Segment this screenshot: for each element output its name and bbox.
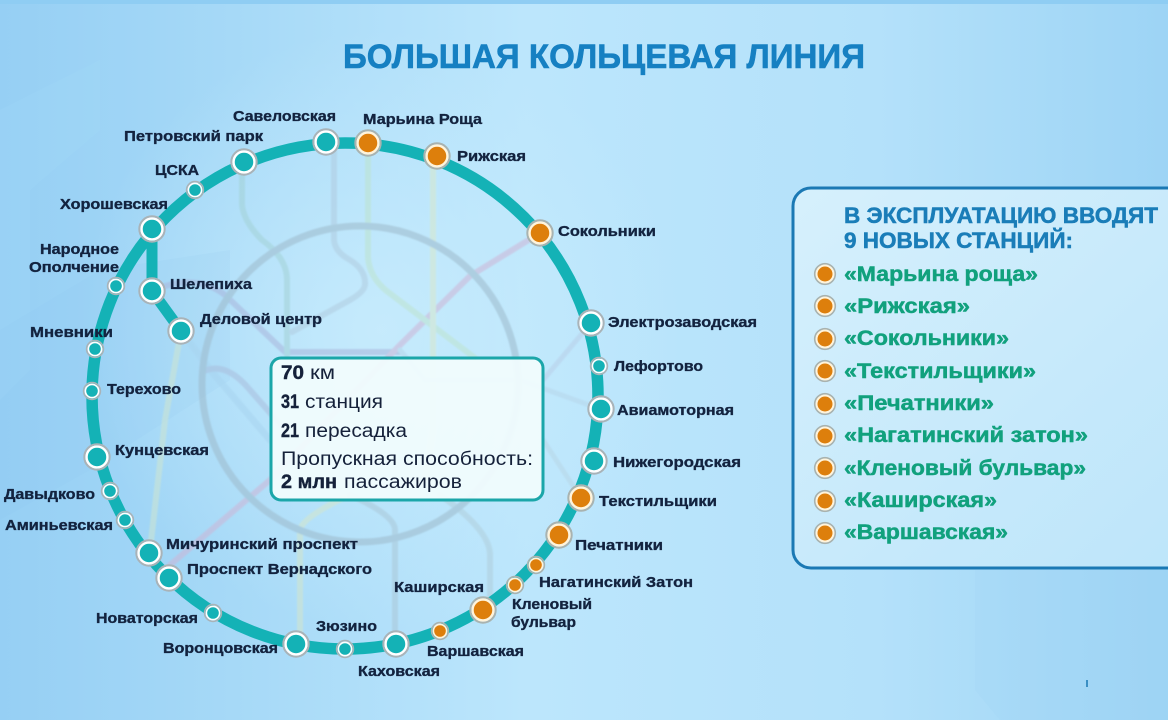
station labels: Давыдково xyxy=(4,486,95,503)
panel heading: 9 НОВЫХ СТАНЦИЙ: xyxy=(844,228,1073,253)
station labels: Сокольники xyxy=(558,223,656,240)
panel: new stations xyxy=(793,188,1168,568)
station labels: Лефортово xyxy=(614,358,703,375)
bullets xyxy=(816,266,834,542)
transfers count: 21 xyxy=(281,421,299,442)
capacity: 2 млн xyxy=(281,472,337,493)
station labels: Мневники xyxy=(30,324,113,341)
branch line xyxy=(152,229,181,331)
existing interchange stations xyxy=(84,129,614,657)
station list: «Печатники» xyxy=(844,392,994,415)
transfers count: пересадка xyxy=(305,421,407,442)
length xyxy=(281,363,335,384)
panel heading xyxy=(844,203,1159,253)
station labels: Мичуринский проспект xyxy=(166,536,358,553)
capacity xyxy=(281,449,533,493)
station list xyxy=(844,263,1088,544)
station labels: Варшавская xyxy=(427,643,524,660)
station list: «Варшавская» xyxy=(844,521,1008,544)
station list: «Рижская» xyxy=(844,295,970,318)
station labels: Аминьевская xyxy=(5,517,113,534)
station labels: бульвар xyxy=(511,614,576,631)
station labels: Печатники xyxy=(575,537,663,554)
station labels: ЦСКА xyxy=(155,162,199,179)
station list: «Марьина роща» xyxy=(844,263,1038,286)
bullet outlines xyxy=(815,264,835,543)
station labels: Ополчение xyxy=(29,259,119,276)
station list: «Сокольники» xyxy=(844,327,1009,350)
station labels: Нагатинский Затон xyxy=(539,574,693,591)
station labels: Кленовый xyxy=(512,596,592,613)
title: БОЛЬШАЯ КОЛЬЦЕВАЯ ЛИНИЯ xyxy=(343,38,865,76)
station labels: Электрозаводская xyxy=(608,314,757,331)
station labels: Нижегородская xyxy=(613,454,741,471)
station labels: Хорошевская xyxy=(60,196,168,213)
station labels: Воронцовская xyxy=(163,640,278,657)
station labels xyxy=(4,108,757,680)
stations count: станция xyxy=(305,392,383,413)
station labels: Народное xyxy=(40,241,119,258)
station labels: Новаторская xyxy=(96,610,198,627)
station labels: Проспект Вернадского xyxy=(187,561,372,578)
length: км xyxy=(310,363,335,384)
station labels: Рижская xyxy=(457,148,526,165)
station labels: Терехово xyxy=(107,381,181,398)
station labels: Каширская xyxy=(394,579,484,596)
station list: «Нагатинский затон» xyxy=(844,424,1088,447)
station list: «Кленовый бульвар» xyxy=(844,457,1086,480)
faint metro map background xyxy=(150,142,600,640)
stations count xyxy=(281,392,383,413)
station labels: Каховская xyxy=(358,663,440,680)
info box xyxy=(271,358,543,500)
station labels: Авиамоторная xyxy=(617,402,734,419)
station list: «Каширская» xyxy=(844,489,997,512)
station labels: Зюзино xyxy=(316,618,377,635)
panel heading: В ЭКСПЛУАТАЦИЮ ВВОДЯТ xyxy=(844,203,1159,228)
stations count: 31 xyxy=(281,392,299,413)
station labels: Петровский парк xyxy=(124,128,264,145)
station labels: Марьина Роща xyxy=(363,111,483,128)
existing small stations xyxy=(84,182,607,657)
ring line xyxy=(92,143,598,649)
station labels: Савеловская xyxy=(233,108,336,125)
station list: «Текстильщики» xyxy=(844,360,1036,383)
station labels: Кунцевская xyxy=(115,442,209,459)
capacity: Пропускная способность: xyxy=(281,449,533,470)
new stations (orange) xyxy=(355,130,594,639)
length: 70 xyxy=(281,363,304,384)
capacity: пассажиров xyxy=(344,472,462,493)
station labels: Текстильщики xyxy=(599,493,717,510)
station labels: Шелепиха xyxy=(170,276,253,293)
station labels: Деловой центр xyxy=(200,311,322,328)
